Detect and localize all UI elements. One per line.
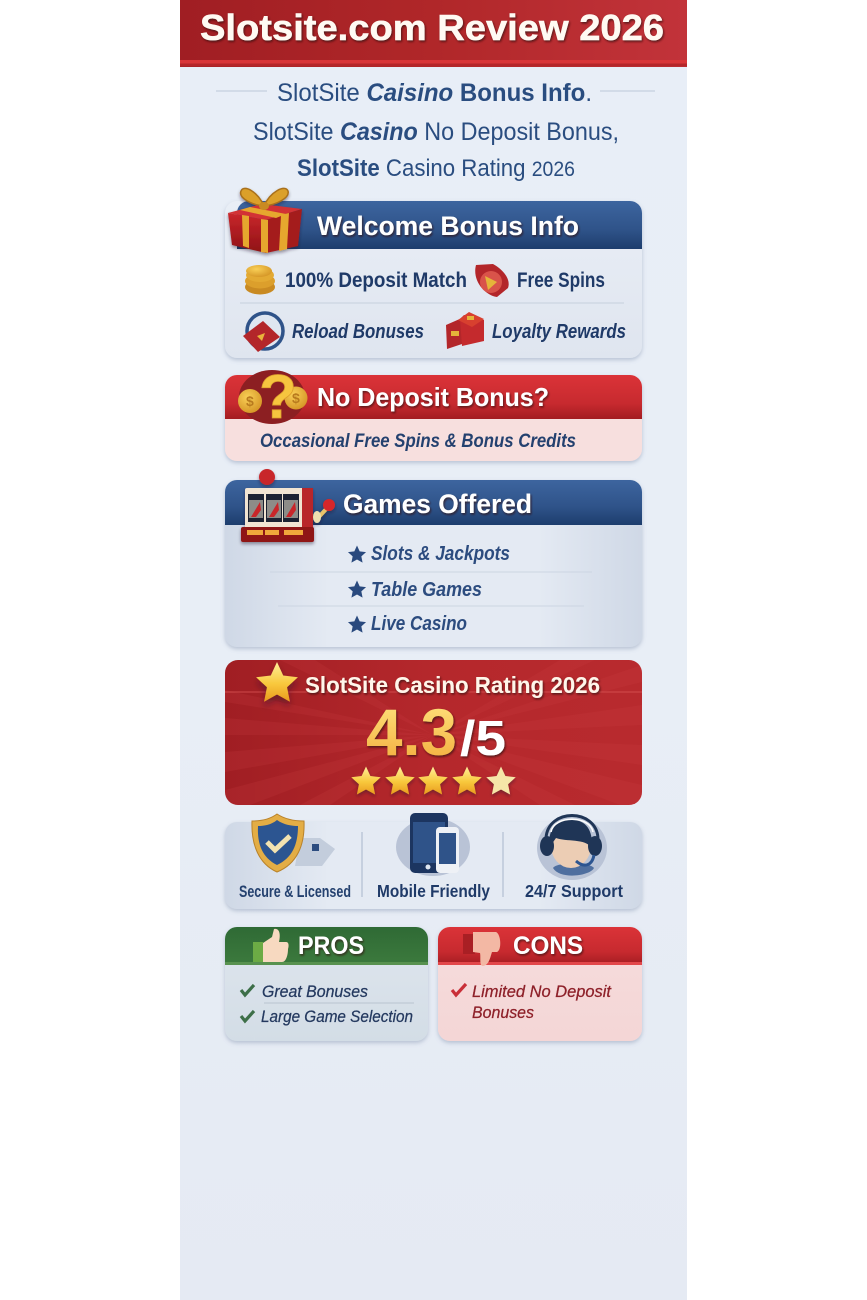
icon: support agent (537, 816, 607, 880)
icon: mobile devices (396, 813, 470, 876)
list: pros (241, 983, 414, 1026)
icon: loyalty rewards (446, 312, 484, 349)
icon: large gold star (256, 662, 298, 702)
panel: no deposit bonus (225, 363, 642, 461)
heading: cons: CONS (513, 932, 583, 960)
subtitle block: SlotSite Casino No Deposit Bonus, (253, 118, 619, 146)
icon: question mark and coins: $ (292, 390, 300, 406)
heading: welcome bonus info: Welcome Bonus Info (317, 211, 579, 241)
text: loyalty rewards: Loyalty Rewards (492, 320, 626, 343)
icon: thumbs down (463, 932, 500, 966)
list: cons (452, 982, 612, 1022)
panel: pros (225, 927, 428, 1041)
subtitle block (216, 79, 655, 182)
text: reload bonuses: Reload Bonuses (292, 320, 424, 343)
icon: question mark and coins (238, 363, 308, 432)
list: games: Table Games (371, 578, 482, 601)
icon: question mark and coins: ? (259, 363, 297, 432)
list: games (270, 542, 592, 635)
list: cons: Limited No Deposit (472, 982, 612, 1001)
icon: shield (252, 814, 335, 872)
panel: casino rating (225, 660, 642, 805)
title: Slotsite.com Review 2026 (200, 7, 664, 48)
list: cons: Bonuses (472, 1003, 534, 1022)
icon: reload bonuses (243, 313, 283, 352)
panel: welcome bonus info (225, 188, 642, 358)
rating score (366, 695, 506, 769)
text: free spins and bonus credits: Occasional Free Spins & Bonus Credits (260, 430, 576, 452)
rating score: /5 (460, 712, 506, 766)
panel: games offered (225, 469, 642, 647)
icon: gold coins (245, 265, 275, 294)
icon: free spins (475, 264, 509, 297)
icon: slot machine (241, 469, 335, 542)
panel: features (225, 813, 642, 909)
rating stars (351, 766, 516, 795)
list: pros: Large Game Selection (261, 1008, 413, 1026)
text: mobile friendly: Mobile Friendly (377, 881, 490, 901)
heading: no deposit bonus: No Deposit Bonus? (317, 382, 549, 412)
page background (180, 0, 687, 1300)
rating score: 4.3 (366, 695, 457, 769)
text: deposit match: 100% Deposit Match (285, 269, 467, 292)
list: games: Slots & Jackpots (371, 542, 510, 565)
icon: gift box (228, 188, 302, 253)
icon: thumbs up (253, 929, 289, 962)
icon: question mark and coins: $ (246, 393, 254, 409)
panel: cons (438, 927, 642, 1041)
subtitle block: SlotSite Casino Rating 2026 (297, 155, 575, 182)
list: games: Live Casino (371, 612, 467, 635)
text: free spins: Free Spins (517, 269, 605, 292)
heading: games offered: Games Offered (343, 489, 532, 519)
heading: casino rating: SlotSite Casino Rating 2026 (305, 672, 600, 698)
list: pros: Great Bonuses (262, 983, 368, 1001)
subtitle block: SlotSite Caisino Bonus Info. (277, 79, 592, 107)
title banner (180, 0, 687, 67)
text: support: 24/7 Support (525, 881, 623, 901)
text: secure and licensed: Secure & Licensed (239, 883, 351, 901)
heading: pros: PROS (298, 932, 364, 960)
